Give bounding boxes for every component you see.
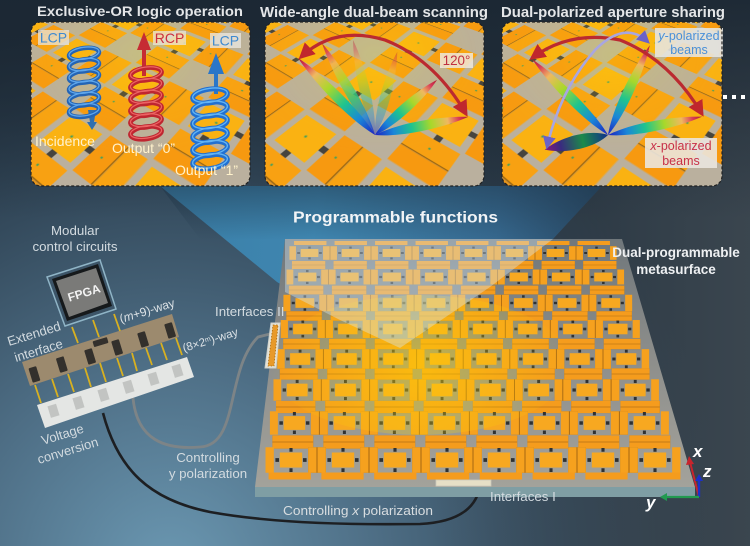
icon: FPGA chip: FPGA [66,281,102,305]
interfaces I connector [436,480,491,486]
arrow: 120 degree scan arc [301,35,466,114]
axes: x [692,442,704,461]
label: controlling y polarization: y polarization [169,466,247,481]
label: LCP output: LCP [212,32,239,48]
label: output 0: Output “0” [112,140,175,156]
ellipsis dots [723,95,745,99]
slab side [255,487,695,497]
label: 8x2^m way: m [204,336,212,344]
label: interfaces I: Interfaces I [490,489,556,504]
yellow wiring [35,314,182,403]
label: incidence: Incidence [35,133,95,149]
label: modular control circuits: Modular [51,223,100,238]
heading: programmable functions: Programmable functions [293,210,498,226]
axes: z [702,462,712,481]
label: LCP incident: LCP [40,30,67,46]
label: controlling y polarization [169,450,247,481]
icon: incident LCP helix [68,45,100,130]
beam lobes fan [294,39,469,140]
arrow: x-polarized scan arc [532,37,702,114]
label: dual-programmable metasurface: Dual-programmable [612,245,740,260]
interfaces II connector [265,323,280,368]
label: y-polarized beams: beams [670,43,708,57]
cable: controlling y polarization [133,334,270,447]
label: modular control circuits: control circuits [33,239,118,254]
panel: exclusive-OR logic operation [31,22,250,186]
label: interfaces II: Interfaces II [215,304,284,319]
label: x-polarized beams: beams [662,154,700,168]
label: x-polarized beams [645,138,717,168]
label: voltage conversion: conversion [35,434,100,467]
label: x-polarized beams: x-polarized [649,139,712,153]
light beam overlay on metasurface [285,239,553,348]
voltage conversion board [37,357,194,428]
slab top [255,239,695,487]
label: voltage conversion: Voltage [39,421,85,448]
icon: FPGA chip [47,260,116,326]
panel: dual-polarized aperture sharing [502,22,723,186]
beam lobes [529,43,703,157]
label: controlling y polarization: Controlling [176,450,240,465]
label: 8x2^m way: (8×2 [181,337,207,355]
label: m+9 way: (m+9)-way [118,296,176,326]
label: dual-programmable metasurface: metasurface [636,262,716,277]
yellow highlight in centre of array [270,295,570,435]
icon: output 0 RCP helix [130,32,162,141]
label: extended interface: Extended [5,318,62,349]
axes [645,442,712,512]
label: 8x2^m way: )-way [209,327,240,346]
title: wide-angle: Wide-angle dual-beam scanning [260,5,488,21]
label: y-polarized beams [655,28,723,57]
title: exclusive-OR: Exclusive-OR logic operation [37,3,243,19]
arrow: y-polarized scan arc [547,33,648,147]
label: dual-programmable metasurface [612,245,740,277]
metasurface cell rows [266,241,680,480]
cable: controlling x polarization [103,413,480,524]
light beam from panels to metasurface [160,186,602,348]
label: output 1: Output “1” [175,162,238,178]
label: y-polarized beams: y-polarized [657,29,720,43]
label: controlling x polarization: Controlling x polarization [283,503,433,518]
label: RCP: RCP [155,30,184,46]
label: extended interface [5,318,65,365]
label: extended interface: interface [12,336,65,365]
label: 120 degrees: 120° [443,53,470,68]
extended interface board [22,314,179,386]
title: dual-polarized: Dual-polarized aperture sharing [501,5,725,21]
icon: output 1 LCP helix [192,53,228,171]
axes: y [645,493,657,512]
interfaces II pins [268,325,278,366]
dual-programmable metasurface [255,239,695,497]
panel: wide-angle dual-beam scanning [265,22,484,186]
label: modular control circuits [33,223,118,254]
